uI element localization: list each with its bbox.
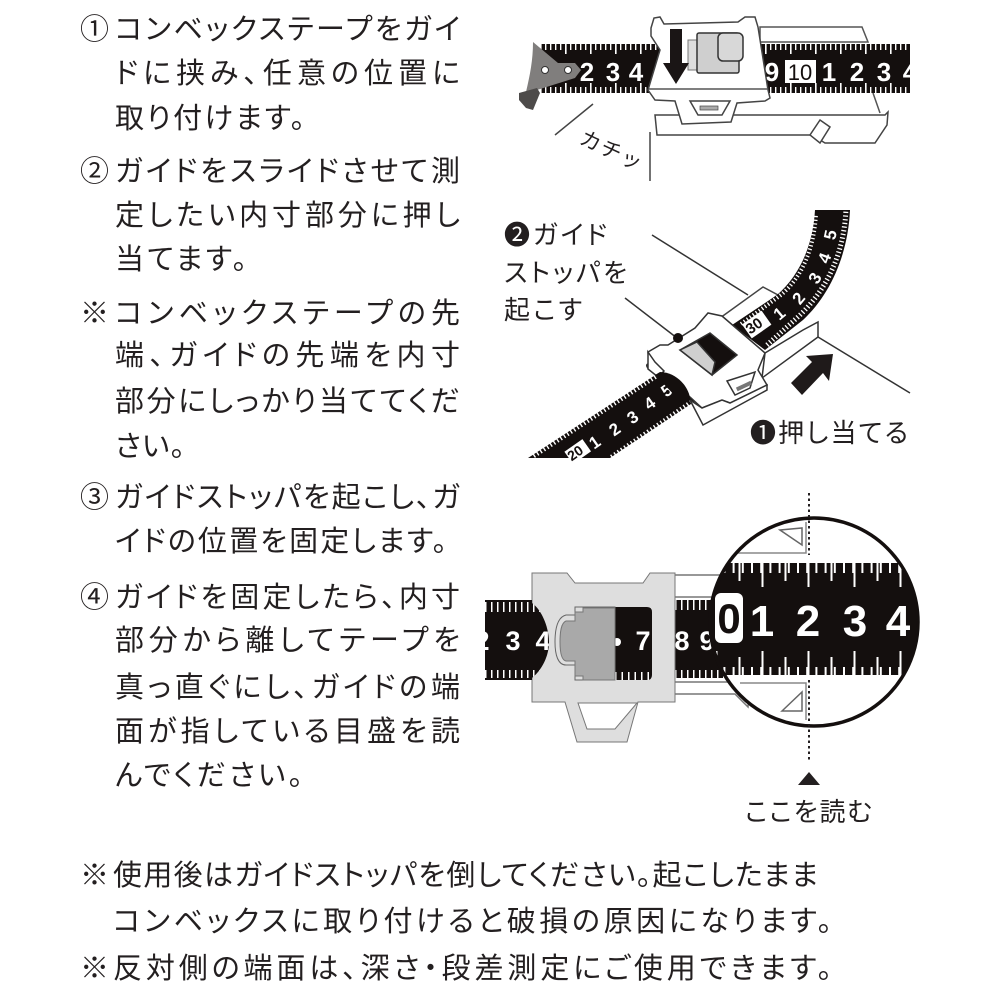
text block: step 4: 真っ直ぐにし、ガイドの端 (115, 664, 460, 706)
upper curved tape: 1 (770, 303, 789, 324)
text block: step 4: ④ (80, 574, 109, 616)
text block: note on tape tip: コンベックステープの先 (115, 290, 460, 332)
dotted reading line (808, 493, 810, 762)
lower straight tape: 3 (624, 407, 642, 428)
diagram 2: pressing the guide and raising the stopper (504, 209, 910, 464)
right tape strip: 9 (699, 626, 715, 656)
text block: bottom notes: ※ (80, 945, 109, 987)
label: press against: ❶押し当てる (750, 413, 908, 450)
diagram 3: reading the scale (474, 493, 925, 829)
magnifier circle: 0 (717, 595, 741, 642)
text block: step 2: ② (80, 148, 109, 190)
upper curved tape: 30 (743, 315, 766, 338)
lower straight tape: 1 (586, 432, 604, 453)
diagram 1: attaching the guide to the tape (519, 17, 918, 181)
left tape strip: 4 (535, 626, 551, 656)
pointer triangle (798, 772, 820, 785)
text block: step 4: 部分から離してテープを (115, 617, 460, 659)
upper curved tape: 2 (788, 289, 809, 308)
tape strip (540, 44, 918, 93)
rail behind (670, 575, 750, 707)
click label: カチッ (575, 122, 648, 177)
upper curved tape (732, 209, 850, 350)
text block: step 3: ③ (80, 474, 109, 516)
click marks (555, 104, 650, 181)
label: raise stopper: ストッパを (504, 253, 627, 290)
text block: step 2: ガイドをスライドさせて測 (115, 148, 460, 190)
tape strip: 3 (877, 57, 891, 87)
left tape strip (485, 600, 549, 680)
tape strip: 2 (850, 57, 864, 87)
guide body (647, 313, 767, 408)
lower straight tape: 4 (641, 393, 660, 414)
guide plate (532, 573, 675, 742)
magnifier circle (705, 518, 925, 726)
label: raise stopper: 起こす (504, 290, 582, 327)
text block: step 2: 定したい内寸部分に押し (115, 192, 460, 234)
upper curved tape: 5 (820, 228, 841, 241)
tape strip: 1 (822, 57, 836, 87)
tape strip: 10 (788, 60, 812, 85)
text block: note on tape tip: ※ (80, 290, 109, 332)
lower straight tape: 5 (658, 380, 676, 401)
text block: step 1: ① (80, 6, 109, 48)
text block: bottom notes: 反対側の端面は、深さ・段差測定にご使用できます。 (113, 945, 832, 987)
arrow: push direction (791, 354, 833, 395)
text block: step 2 (80, 148, 460, 278)
label: raise stopper: ❷ガイド (504, 215, 607, 252)
text block: step 4: 面が指している目盛を読 (115, 708, 460, 750)
upper rail behind tape (760, 27, 868, 42)
tape strip: 9 (765, 57, 779, 87)
label: read here: ここを読む (745, 792, 872, 829)
tape strip: 4 (629, 57, 644, 87)
left tape strip: 3 (505, 626, 521, 656)
text block: step 3: ガイドストッパを起こし、ガ (115, 474, 460, 516)
leader lines (625, 235, 910, 393)
lower rail (655, 112, 888, 143)
guide window with stopper (680, 333, 737, 375)
upper curved tape: 3 (805, 269, 826, 287)
tape strip: 3 (606, 57, 620, 87)
stopper pin (673, 333, 683, 343)
guide body (648, 17, 770, 124)
guide stopper (688, 33, 743, 73)
right tape strip (660, 600, 725, 678)
text block: step 3 (80, 474, 460, 560)
text block: step 1: ドに挟み、任意の位置に (115, 50, 460, 92)
guide front rail (762, 322, 818, 378)
guide window: 7 (635, 626, 651, 656)
text block: step 1: コンベックステープをガイ (115, 6, 460, 48)
rail behind upper tape (720, 287, 778, 330)
tape end hook (526, 42, 581, 92)
text block: note on tape tip: 端、ガイドの先端を内寸 (115, 332, 460, 374)
text block: bottom notes: 使用後はガイドストッパを倒してください。起こしたまま (113, 852, 818, 894)
label: raise stopper (504, 215, 627, 327)
magnifier circle: 4 (886, 597, 911, 646)
lower straight tape: 2 (606, 419, 624, 440)
text block: step 4 (80, 574, 460, 794)
lower straight tape (528, 370, 697, 464)
text block: bottom notes (80, 852, 832, 987)
guide window (555, 607, 652, 680)
text block: step 1 (80, 6, 460, 137)
text block: bottom notes: ※ (80, 852, 109, 894)
text block: step 1: 取り付けます。 (115, 95, 305, 137)
text block: step 4: ガイドを固定したら、内寸 (115, 574, 460, 616)
left tape strip: 2 (474, 626, 490, 656)
magnifier circle: 3 (843, 597, 867, 646)
text block: step 4: んでください。 (115, 752, 303, 794)
text block: bottom notes: コンベックスに取り付けると破損の原因になります。 (113, 898, 832, 940)
arrow: push down (663, 29, 689, 84)
text block: step 3: イドの位置を固定します。 (115, 518, 447, 560)
tape strip: 2 (580, 57, 594, 87)
text block: note on tape tip: さい。 (115, 423, 185, 465)
tape strip: 4 (903, 57, 918, 87)
lower straight tape: 20 (564, 442, 586, 464)
text block: step 2: 当てます。 (115, 236, 247, 278)
right tape strip: 8 (674, 626, 690, 656)
magnifier circle: 2 (796, 597, 820, 646)
text block: note on tape tip (80, 290, 460, 465)
text block: note on tape tip: 部分にしっかり当ててくだ (115, 378, 460, 420)
upper curved tape: 4 (814, 250, 836, 266)
magnifier circle: 1 (750, 597, 774, 646)
